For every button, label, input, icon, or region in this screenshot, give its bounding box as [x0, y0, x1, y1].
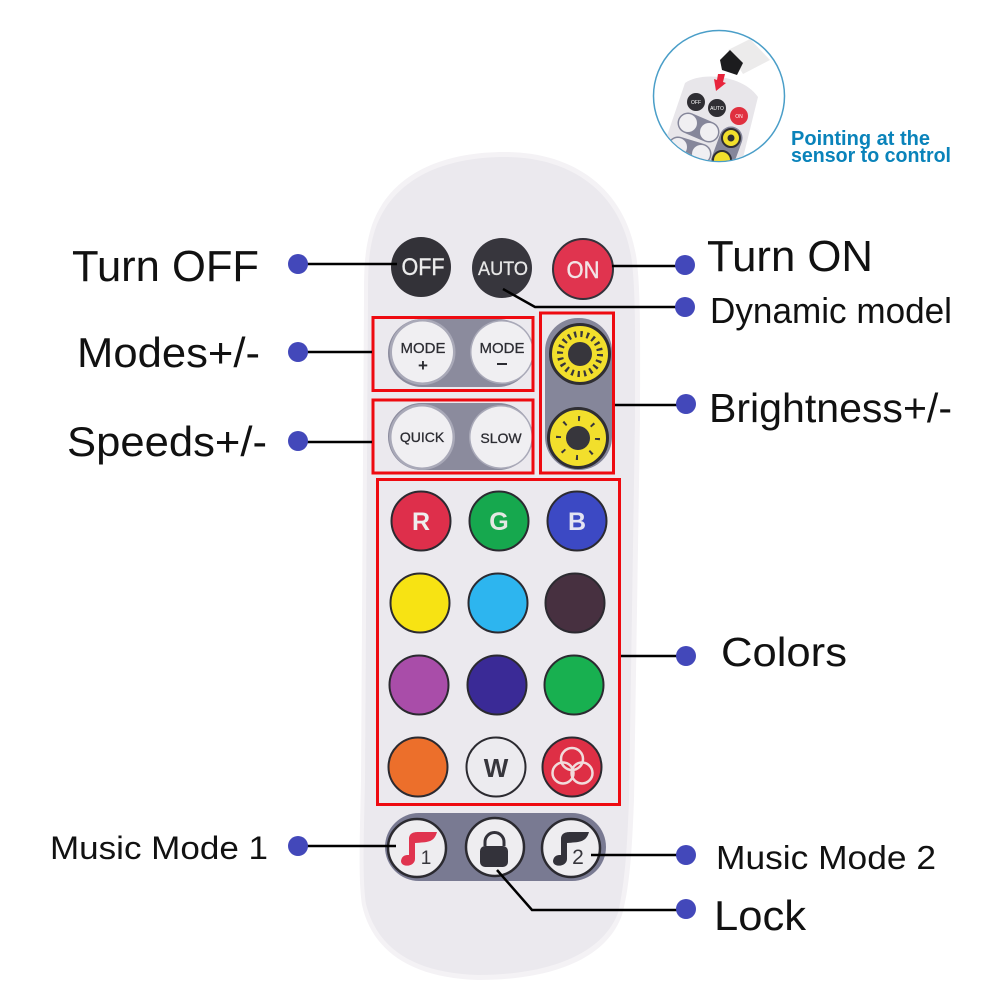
- button: yellow: [390, 574, 450, 632]
- button: SLOW: SLOW: [480, 430, 522, 446]
- caption: pointing at the sensor: sensor to control: [791, 145, 951, 167]
- remote control body: [360, 152, 640, 980]
- button: ON: ON: [566, 257, 600, 284]
- button: SLOW: [469, 405, 533, 469]
- top buttons: [391, 237, 613, 299]
- colour buttons: [388, 492, 606, 796]
- label: Brightness: Brightness+/-: [709, 385, 952, 431]
- button: music 2: 2: [572, 846, 584, 869]
- button: dark plum: [546, 574, 604, 632]
- label: Music Mode 2: Music Mode 2: [716, 839, 936, 876]
- callout dots: [288, 254, 696, 919]
- button: music 1: [388, 819, 446, 877]
- label: Speeds: Speeds+/-: [67, 418, 267, 465]
- button: music 1: 1: [421, 848, 431, 869]
- label: Music Mode 1: Music Mode 1: [50, 830, 268, 866]
- button: music 2: [542, 819, 600, 877]
- button: QUICK: [389, 404, 455, 470]
- button: B: [548, 492, 606, 550]
- inset: pointing at sensor: [650, 30, 784, 170]
- button: AUTO: AUTO: [478, 259, 528, 280]
- button: brightness up: [550, 324, 610, 384]
- button: G: [470, 492, 528, 550]
- button: OFF: [391, 237, 451, 297]
- mode buttons: [388, 319, 534, 387]
- label: Dynamic model: Dynamic model: [710, 290, 952, 331]
- brightness buttons: [545, 318, 612, 470]
- label: Turn OFF: Turn OFF: [72, 242, 259, 291]
- button: ON: [553, 239, 613, 299]
- button: MODE -: [470, 320, 534, 384]
- button: MODE -: MODE: [480, 340, 524, 357]
- button: OFF: OFF: [402, 254, 444, 281]
- mini buttons: [670, 93, 748, 161]
- button: QUICK: QUICK: [400, 429, 445, 445]
- label: Lock: Lock: [714, 892, 807, 939]
- button: brightness down: [548, 408, 608, 468]
- button: MODE +: +: [418, 356, 428, 375]
- highlight frames: [373, 313, 620, 804]
- button: MODE +: [390, 319, 456, 385]
- button: indigo: [468, 656, 526, 714]
- leader lines: [298, 264, 686, 910]
- red arrow: [714, 74, 726, 91]
- label: Modes: Modes+/-: [77, 329, 260, 376]
- caption: pointing at the sensor: Pointing at the: [791, 128, 930, 150]
- button: W: W: [484, 753, 509, 783]
- button: AUTO: [472, 238, 532, 298]
- button: R: [392, 492, 450, 550]
- caption: pointing at the sensor: [791, 128, 951, 167]
- button: purple: [390, 656, 448, 714]
- button: MODE +: MODE: [400, 340, 446, 357]
- mini sensor cable: [728, 39, 770, 74]
- label: Turn ON: Turn ON: [707, 232, 873, 281]
- button: lock: [466, 818, 524, 876]
- mini buttons: OFF: [691, 100, 701, 106]
- button: RGB cycle: [542, 738, 602, 796]
- button: sky blue: [468, 574, 528, 632]
- mini buttons: ON: [735, 114, 743, 120]
- button: W: [466, 738, 526, 796]
- music buttons: [385, 813, 606, 881]
- button: B: B: [568, 508, 586, 536]
- button: G: G: [489, 508, 509, 536]
- button: orange: [388, 738, 448, 796]
- mini remote: [667, 76, 758, 161]
- speed buttons: [388, 403, 533, 470]
- label: Colors: Colors: [721, 629, 847, 675]
- mini buttons: AUTO: [710, 106, 724, 112]
- button: R: R: [412, 508, 430, 536]
- button: green: [544, 656, 604, 714]
